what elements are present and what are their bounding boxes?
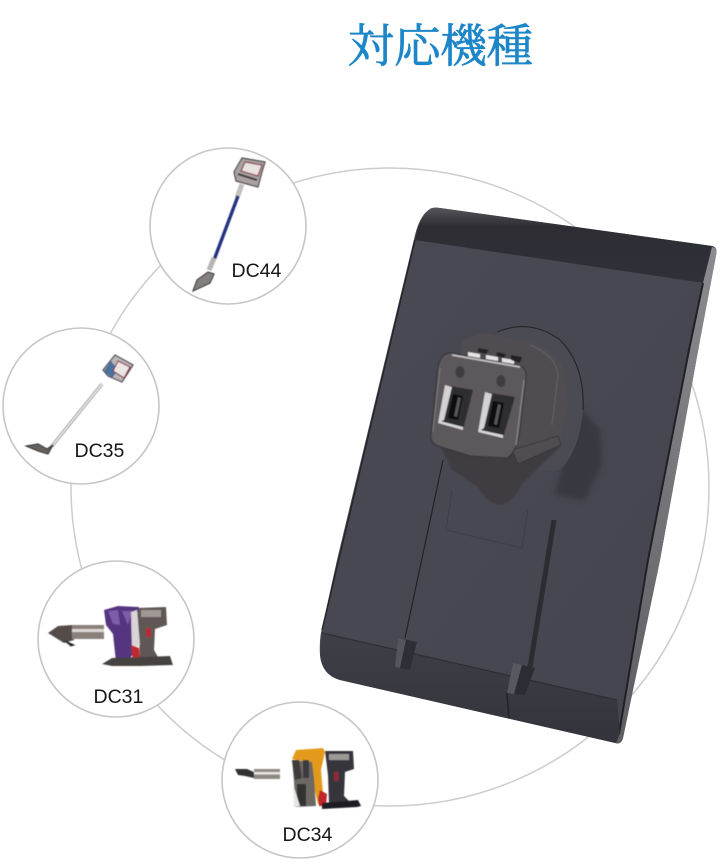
rail lines	[405, 460, 443, 638]
connector shadow	[555, 405, 602, 500]
bottom band	[320, 633, 620, 743]
icon: DC44 vacuum	[193, 158, 265, 291]
connector lower body	[440, 446, 560, 505]
panel: DC34	[222, 702, 378, 858]
rail clips	[395, 638, 535, 718]
contact slots	[468, 348, 522, 364]
panel: DC44	[150, 148, 306, 304]
USB port left	[438, 385, 473, 430]
battery body outline	[320, 208, 716, 743]
connector front face	[431, 353, 526, 458]
indicator dots	[456, 366, 506, 387]
title: 対応機種	[348, 21, 533, 72]
connector rear housing	[450, 333, 568, 472]
connector assembly	[431, 333, 568, 505]
panel: DC35	[3, 328, 159, 484]
icon: DC34 vacuum	[235, 748, 361, 809]
label: DC44: DC44	[232, 260, 282, 282]
connector back plate	[497, 327, 583, 470]
panel: DC31	[38, 561, 194, 717]
label: DC31: DC31	[94, 686, 143, 708]
USB port right	[478, 392, 515, 438]
top dark band	[415, 208, 715, 283]
icon: DC35 vacuum	[26, 355, 133, 454]
connecting ring	[71, 168, 709, 806]
label: DC34: DC34	[282, 824, 333, 846]
left edge shadow	[322, 240, 415, 630]
label: DC35: DC35	[74, 440, 125, 462]
icon: DC31 vacuum	[48, 606, 173, 666]
right side edge	[616, 247, 716, 743]
panel: battery	[320, 208, 716, 743]
